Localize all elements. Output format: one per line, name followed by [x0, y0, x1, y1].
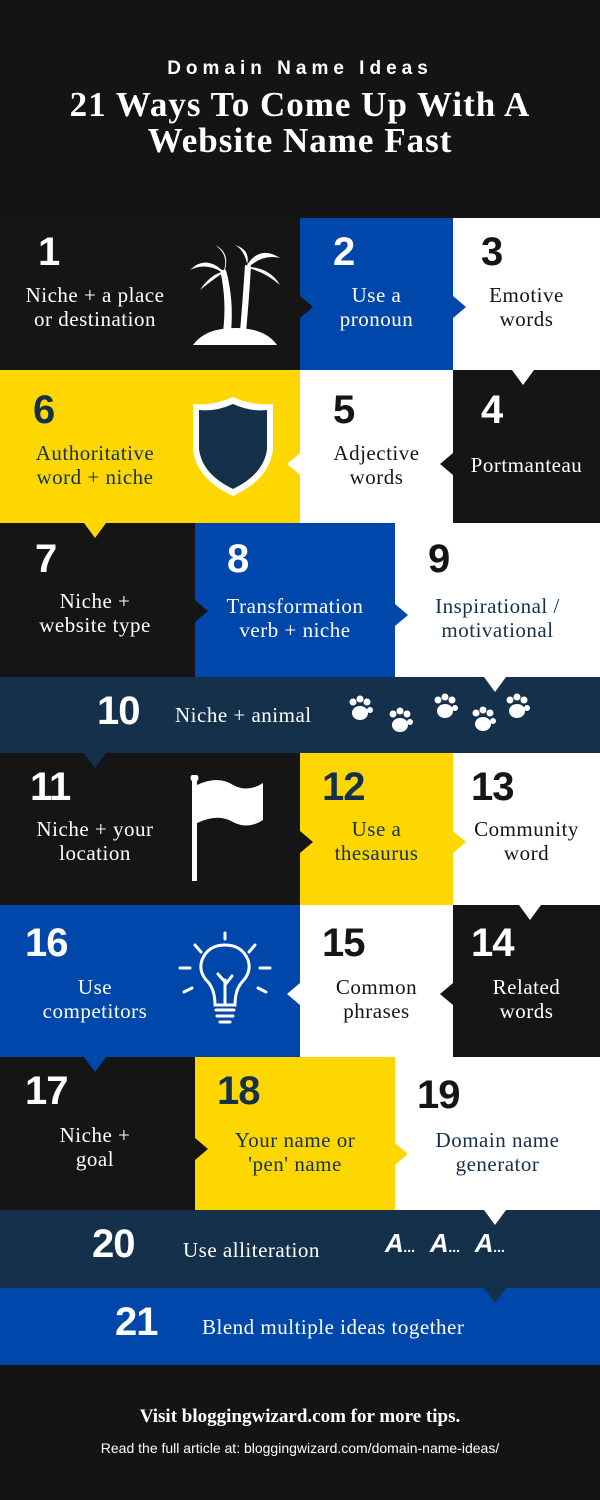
- box 18: Your name or: [235, 1128, 355, 1152]
- title: [70, 85, 530, 160]
- title: 21 Ways To Come Up With A: [70, 85, 530, 124]
- box 15: [300, 905, 453, 1057]
- box 9: [395, 523, 600, 677]
- box 12: Use a: [352, 817, 401, 841]
- box 6: word + niche: [36, 465, 153, 489]
- box 13: 13: [471, 765, 514, 809]
- box 6: Authoritative: [36, 441, 154, 465]
- box 4: Portmanteau: [471, 453, 582, 477]
- box 17: [0, 1057, 195, 1210]
- box 11: Niche + your: [36, 817, 153, 841]
- box 7: [0, 523, 195, 677]
- box 17: 17: [25, 1069, 68, 1113]
- box 9: 9: [428, 537, 449, 581]
- box 2: 2: [333, 230, 354, 274]
- box 11: location: [59, 841, 131, 865]
- box 13: [453, 753, 600, 905]
- row 20: Use alliteration: [183, 1238, 320, 1262]
- row 20: 20: [92, 1222, 134, 1266]
- row 10: [0, 677, 600, 753]
- box 19: Domain name: [436, 1128, 559, 1152]
- row 3: [35, 523, 600, 692]
- footer: [101, 1406, 500, 1456]
- row 5: [30, 753, 600, 920]
- box 14: Related: [493, 975, 560, 999]
- header: [70, 58, 530, 160]
- subtitle: Domain Name Ideas: [167, 58, 433, 79]
- box 5: words: [350, 465, 403, 489]
- box 16: competitors: [43, 999, 147, 1023]
- icon: flag: [190, 775, 263, 881]
- box 18: 18: [217, 1069, 260, 1113]
- box 8: Transformation: [227, 594, 363, 618]
- box 15: phrases: [343, 999, 410, 1023]
- box 15: 15: [322, 921, 364, 965]
- box 7: Niche +: [60, 589, 130, 613]
- box 16: Use: [78, 975, 112, 999]
- icon: A... letters: A... A... A...: [385, 1228, 505, 1258]
- box 18: [195, 1057, 395, 1210]
- row 6: [0, 905, 560, 1072]
- row 20: [0, 1210, 600, 1288]
- box 9: Inspirational /: [435, 594, 560, 618]
- box 14: 14: [471, 921, 514, 965]
- box 6: [0, 370, 300, 523]
- row 10: 10: [97, 689, 140, 733]
- row 1: [26, 218, 600, 385]
- box 17: Niche +: [60, 1123, 130, 1147]
- box 3: [453, 218, 600, 370]
- box 8: [195, 523, 395, 677]
- row 21: Blend multiple ideas together: [202, 1315, 464, 1339]
- box 3: 3: [481, 230, 502, 274]
- box 19: [395, 1057, 600, 1210]
- row 2: [0, 370, 582, 538]
- footer main: Visit bloggingwizard.com for more tips.: [140, 1406, 460, 1427]
- box 17: goal: [76, 1147, 114, 1171]
- box 11: 11: [30, 765, 70, 809]
- box 12: 12: [322, 765, 364, 809]
- box 16: 16: [25, 921, 68, 965]
- row 21: [0, 1288, 600, 1365]
- box 18: 'pen' name: [248, 1152, 342, 1176]
- box 5: [300, 370, 453, 523]
- box 12: thesaurus: [335, 841, 418, 865]
- box 11: [0, 753, 300, 905]
- icon: shield: [193, 397, 273, 496]
- row 21: 21: [115, 1300, 158, 1344]
- box 3: Emotive: [489, 283, 564, 307]
- icon: palm island: [190, 245, 280, 345]
- icon: light bulb: [178, 932, 272, 1024]
- box 12: [300, 753, 453, 905]
- box 14: words: [500, 999, 553, 1023]
- box 6: 6: [33, 388, 54, 432]
- box 3: words: [500, 307, 553, 331]
- box 5: Adjective: [333, 441, 420, 465]
- box 19: generator: [456, 1152, 539, 1176]
- box 19: 19: [417, 1073, 460, 1117]
- row 7: [25, 1057, 600, 1225]
- box 4: [453, 370, 600, 523]
- box 2: pronoun: [340, 307, 413, 331]
- box 14: [453, 905, 600, 1057]
- box 9: motivational: [441, 618, 554, 642]
- box 1: Niche + a place: [26, 283, 164, 307]
- box 7: 7: [35, 537, 56, 581]
- title: Website Name Fast: [148, 121, 452, 160]
- box 1: [0, 218, 300, 370]
- row 10: Niche + animal: [175, 703, 312, 727]
- box 4: 4: [481, 388, 502, 432]
- box 15: Common: [336, 975, 417, 999]
- footer link: Read the full article at: bloggingwizard.com/domain-name-ideas/: [101, 1440, 499, 1456]
- box 5: 5: [333, 388, 354, 432]
- box 2: [300, 218, 453, 370]
- box 13: Community: [474, 817, 579, 841]
- box 8: 8: [227, 537, 248, 581]
- box 7: website type: [39, 613, 151, 637]
- icon: paw prints: [350, 694, 530, 732]
- box 1: 1: [38, 230, 59, 274]
- box 13: word: [504, 841, 549, 865]
- box 1: or destination: [34, 307, 156, 331]
- box 2: Use a: [352, 283, 401, 307]
- box 16: [0, 905, 300, 1057]
- box 8: verb + niche: [239, 618, 351, 642]
